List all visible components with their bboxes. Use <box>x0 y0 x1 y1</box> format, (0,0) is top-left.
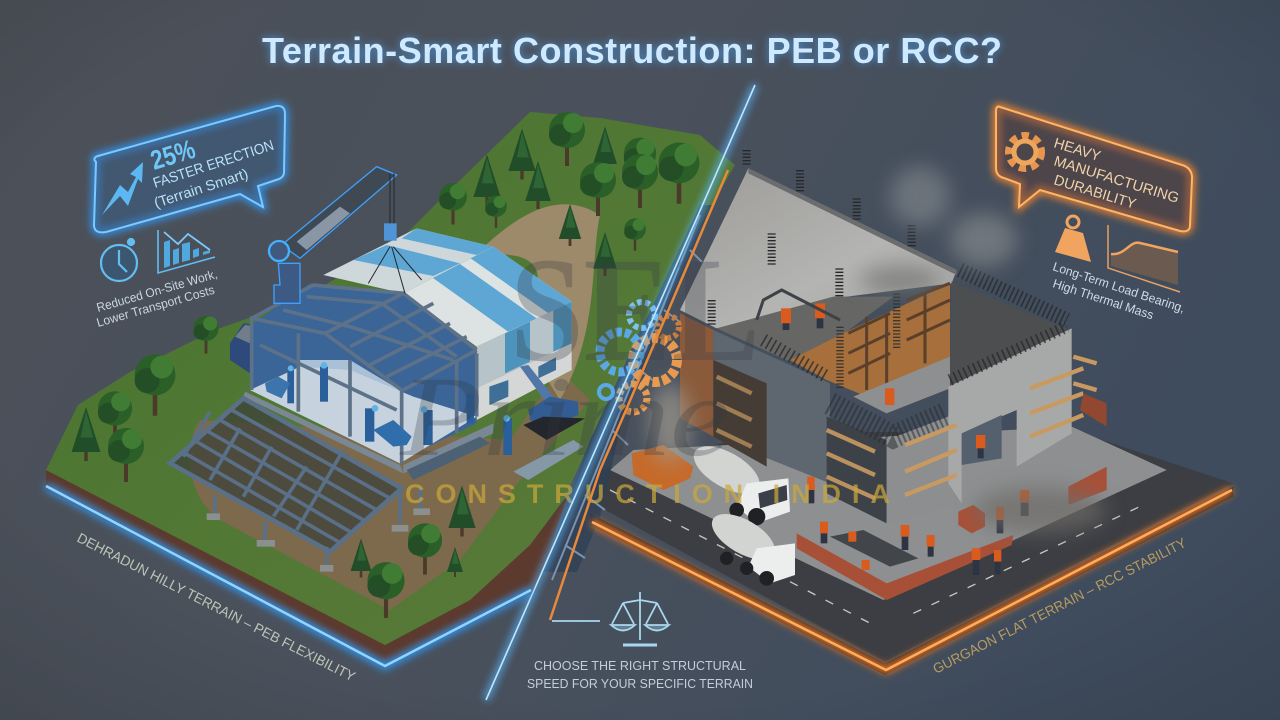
slab parapet edge <box>748 168 957 275</box>
orange island edge <box>592 490 1232 670</box>
corrugated side wall <box>477 302 572 388</box>
workers in hall <box>287 362 512 455</box>
title: Terrain-Smart Construction: PEB or RCC? <box>262 30 1002 71</box>
stacked steel on floor <box>373 420 412 447</box>
glowing base edges <box>46 486 1232 670</box>
dumper truck <box>632 445 693 490</box>
watermark logo letters: SEL <box>510 227 760 393</box>
main roof slab <box>680 168 957 328</box>
side wall base <box>477 340 572 420</box>
excavator <box>520 365 585 440</box>
floor plinth <box>243 392 493 473</box>
forest on hilltop <box>439 112 699 276</box>
PEB hall <box>230 228 585 480</box>
trees lower left <box>72 316 219 482</box>
icon: stopwatch <box>101 239 137 281</box>
divider: steel lattice and gears <box>543 205 712 580</box>
concrete floor <box>250 367 477 463</box>
bottom tagline group <box>527 592 753 691</box>
callout: heavy manufacturing durability <box>996 107 1192 231</box>
steel deck platform <box>170 398 430 568</box>
site ground <box>610 427 1167 600</box>
watermark company name: CONSTRUCTION INDIA <box>405 479 890 509</box>
rebar fences <box>712 150 1067 437</box>
text: reduced on-site work: Reduced On-Site Work, <box>95 267 219 315</box>
icon: rising arrow <box>102 162 143 215</box>
mobile crane arm <box>269 167 422 303</box>
front left wall <box>713 330 830 483</box>
foundation beam <box>407 437 490 480</box>
callout text: HEAVY <box>1052 136 1103 165</box>
title: Terrain-Smart Construction: PEB or RCC? <box>262 30 1002 71</box>
text: reduced on-site work: Lower Transport Costs <box>95 283 216 330</box>
callout: 25% faster erection <box>94 106 285 232</box>
tagline text: CHOOSE THE RIGHT STRUCTURAL <box>534 658 746 673</box>
callout text: DURABILITY <box>1052 173 1138 213</box>
brown left wall <box>680 313 713 437</box>
watermark <box>399 227 890 509</box>
dust and smoke <box>650 167 1107 533</box>
callout text <box>147 134 276 212</box>
window openings <box>489 357 556 405</box>
road <box>587 430 1233 662</box>
callout text: 25% <box>147 134 199 176</box>
panel: Gurgaon flat terrain island <box>587 150 1233 675</box>
icon: balance scale <box>552 592 669 645</box>
tagline text: SPEED FOR YOUR SPECIFIC TERRAIN <box>527 676 753 691</box>
brick walls <box>797 393 1107 600</box>
label: Dehradun hilly terrain: DEHRADUN HILLY TERRAIN – PEB FLEXIBILITY <box>75 529 359 685</box>
soil side walls of island <box>46 470 568 664</box>
front centre block <box>827 417 887 523</box>
cement mixer truck one <box>686 437 790 525</box>
callout text: FASTER ERECTION <box>151 138 276 192</box>
interior back wall <box>250 283 477 460</box>
label: Gurgaon flat terrain: GURGAON FLAT TERRAIN – RCC STABILITY <box>930 534 1189 677</box>
watermark script: Prime <box>399 353 730 480</box>
slab side edge <box>590 487 1233 675</box>
workers <box>781 303 1029 570</box>
steel lattice along diagonal <box>543 205 712 572</box>
scaffolding <box>717 357 1097 498</box>
mini boom pump <box>757 290 840 320</box>
truck behind hall <box>230 323 300 380</box>
steel frame <box>252 285 477 463</box>
callout bubble <box>996 107 1192 231</box>
blue island edge <box>46 486 531 666</box>
cement mixer truck two <box>705 505 795 586</box>
inner courtyard <box>853 282 1070 413</box>
right wing wall <box>948 328 1072 503</box>
icon: load curve chart <box>1108 225 1180 292</box>
dirt road and excavated soil <box>190 370 590 610</box>
trees lower middle <box>351 486 476 618</box>
callout text <box>1052 136 1181 213</box>
callout text: (Terrain Smart) <box>152 166 250 212</box>
icon: falling cost chart <box>158 230 215 273</box>
callout text: MANUFACTURING <box>1052 154 1181 207</box>
hillside ground <box>46 112 735 645</box>
steel pipes on ground <box>513 440 583 480</box>
wet concrete floor <box>717 297 893 362</box>
icon: weight <box>1055 216 1091 262</box>
text: long-term load bearing: Long-Term Load Bearing, <box>1051 260 1187 315</box>
formwork panels <box>790 283 950 397</box>
panel: Dehradun hilly terrain island <box>46 112 735 664</box>
cooperating gears <box>599 302 679 412</box>
diagonal light lines <box>486 85 755 700</box>
callout bubble <box>94 106 285 232</box>
tagline text <box>527 658 753 691</box>
text: long-term load bearing: High Thermal Mass <box>1051 277 1155 322</box>
road markings <box>610 490 1147 627</box>
roof left sheet <box>323 228 493 293</box>
icon: gear <box>1009 136 1041 168</box>
roof right sheet <box>403 247 572 347</box>
